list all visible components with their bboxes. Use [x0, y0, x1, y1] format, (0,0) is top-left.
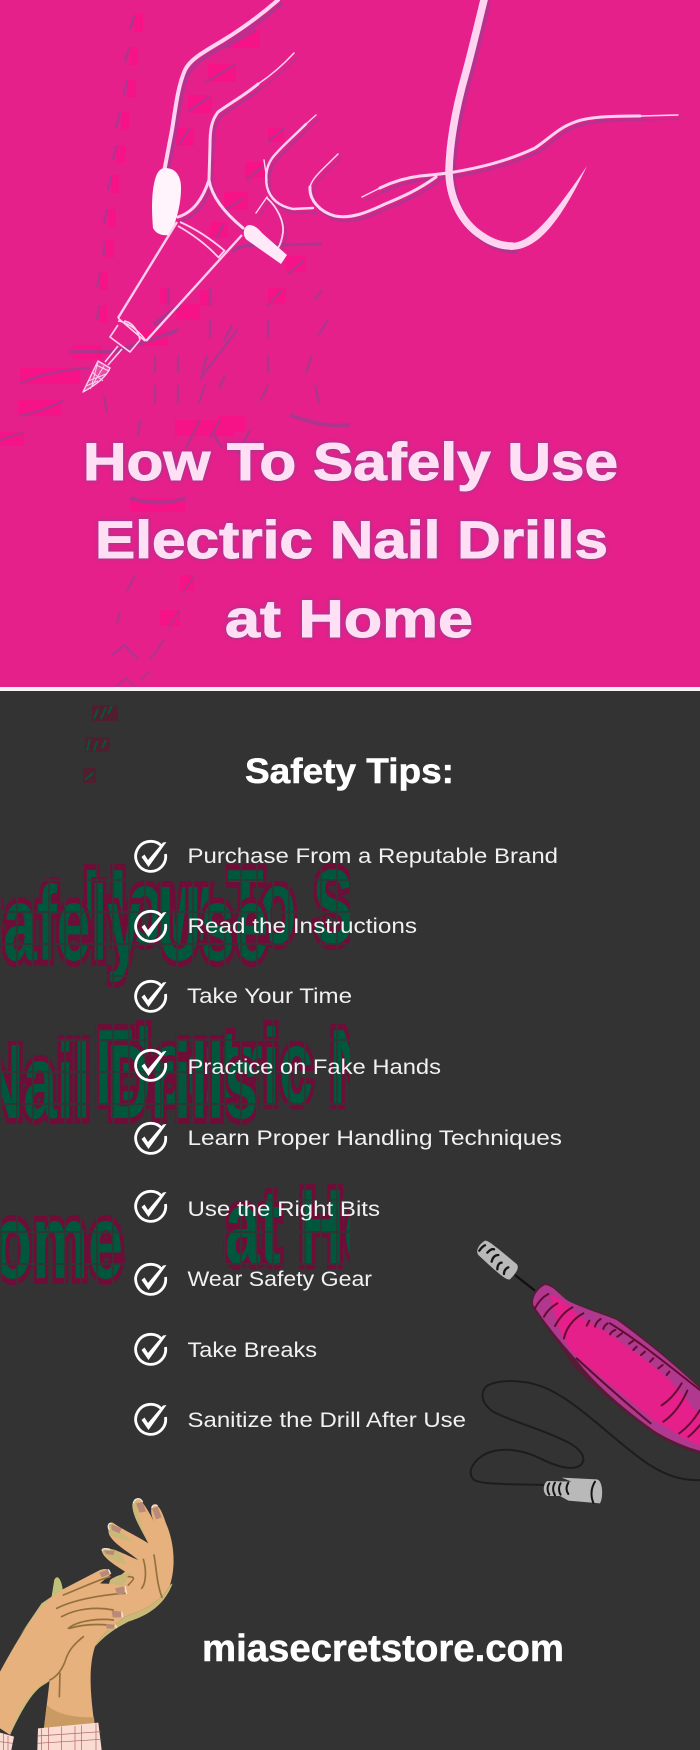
decorative ghost ticks — [83, 705, 118, 783]
illustration: pink nail drill with cord — [471, 1241, 700, 1503]
tip 4: Practice on Fake Hands — [188, 1055, 441, 1079]
tip 5: Learn Proper Handling Techniques — [188, 1126, 562, 1150]
safety tips list — [136, 841, 562, 1434]
tip 3: Take Your Time — [187, 984, 352, 1008]
front hand — [0, 1569, 127, 1735]
illustration: hand holding nail drill — [83, 0, 681, 392]
fingernails — [99, 1502, 162, 1629]
left sleeve — [0, 1733, 14, 1750]
panel: white divider — [0, 687, 700, 691]
heading: Safety Tips: Safety Tips: — [245, 752, 454, 791]
title: Electric Nail Drills — [95, 511, 608, 570]
front hand edge shading — [10, 1577, 63, 1735]
tip 5 — [136, 1123, 562, 1153]
ghost of the title behind the list: Electric Nail Drills — [95, 1007, 608, 1126]
nail tips — [102, 1499, 158, 1628]
tip 1 — [136, 841, 558, 871]
drill body — [531, 1283, 700, 1455]
nail: fingertip — [152, 168, 181, 235]
tip 6: Use the Right Bits — [188, 1197, 380, 1221]
panel: pink header background — [0, 0, 700, 688]
tip 4 — [136, 1050, 441, 1080]
hand outlines — [164, 0, 678, 248]
nail: second fingertip — [244, 225, 287, 264]
right sleeve — [37, 1723, 102, 1750]
tip 8 — [136, 1334, 317, 1364]
tip 8: Take Breaks — [188, 1338, 317, 1362]
title — [83, 433, 618, 649]
power plug — [544, 1478, 602, 1503]
tip 9 — [136, 1404, 466, 1434]
illustration: hands — [0, 1499, 174, 1750]
ghost of the title behind the list: at Home — [225, 1167, 473, 1286]
tip 2 — [136, 911, 417, 941]
tip 7: Wear Safety Gear — [188, 1267, 372, 1291]
panel: dark lower background — [0, 691, 700, 1750]
nail drill handpiece — [83, 222, 242, 392]
tip 2: Read the Instructions — [188, 914, 417, 938]
tip 7 — [136, 1264, 372, 1294]
wrist shadow — [44, 1705, 95, 1728]
line shadow — [167, 4, 681, 252]
tip 9: Sanitize the Drill After Use — [188, 1408, 466, 1432]
hand crease lines — [50, 1555, 162, 1697]
tip 6 — [136, 1191, 380, 1221]
ghost of the title behind the list — [0, 863, 350, 1285]
tapered tail — [510, 166, 587, 250]
cord — [471, 1381, 700, 1485]
gray end cap — [477, 1241, 518, 1279]
decorative ghost marks in header — [0, 14, 350, 690]
tip 1: Purchase From a Reputable Brand — [188, 844, 558, 868]
tip 3 — [136, 981, 352, 1011]
shaft — [515, 1275, 535, 1291]
ghost of the title behind the list: How To Safely Use — [83, 847, 618, 966]
title: How To Safely Use — [83, 433, 618, 492]
rear hand — [44, 1499, 174, 1728]
title: at Home — [225, 590, 473, 649]
website footer: miasecretstore.com — [202, 1628, 564, 1670]
rear hand shading — [95, 1499, 173, 1647]
